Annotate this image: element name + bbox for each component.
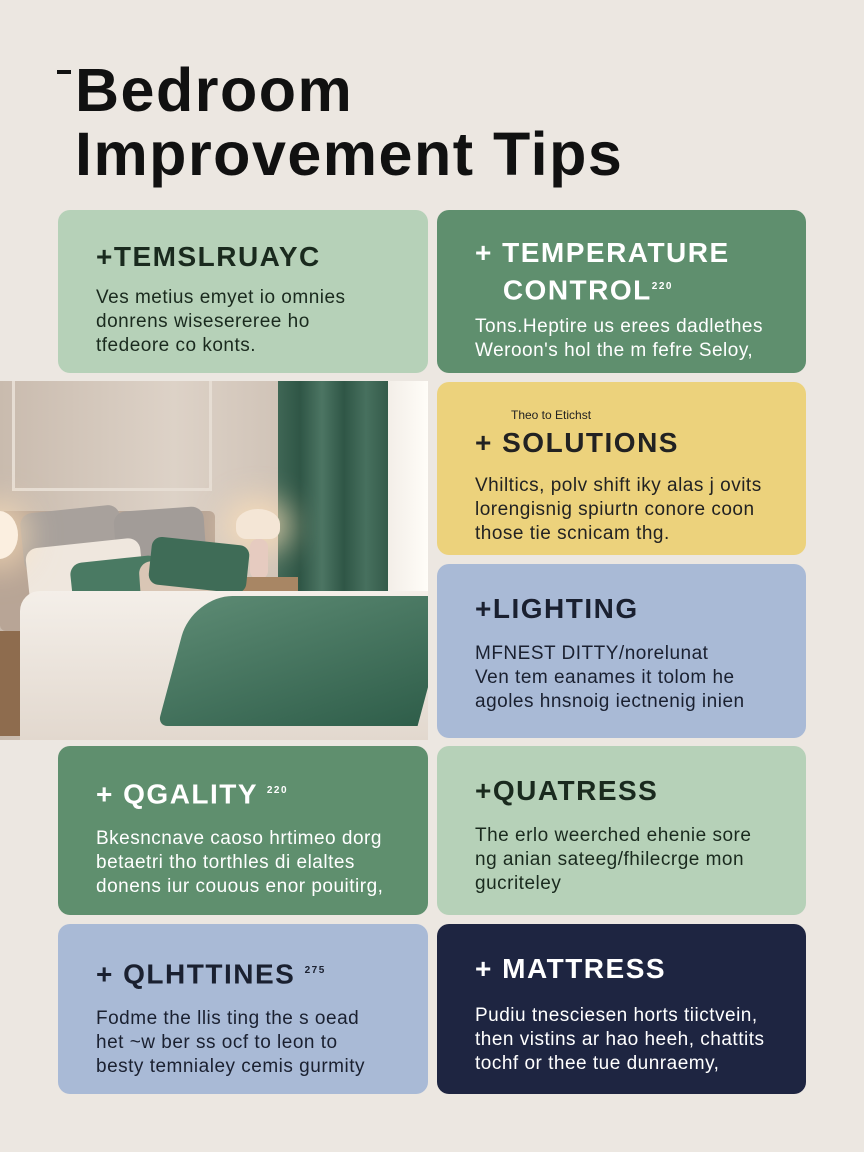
panel: temslruayc: tfedeore co konts. (96, 335, 256, 356)
panel: qgality: donens iur couous enor pouitirg, (96, 876, 383, 897)
panel: qlhttines: besty temnialey cemis gurmity (96, 1056, 365, 1077)
panel: solutions: lorengisnig spiurtn conore coon (475, 499, 755, 520)
panel: lighting: +LIGHTING (475, 593, 639, 624)
panel: temperature control (437, 210, 806, 373)
panel: temperature control: + TEMPERATURE (475, 237, 730, 268)
panel: lighting (437, 564, 806, 738)
panel: temperature control: Weroon's hol the m fefre Seloy, (475, 340, 753, 361)
panel: quatress (437, 746, 806, 915)
panel: qgality: betaetri tho torthles di elaltes (96, 852, 355, 873)
panel: qlhttines: Fodme the llis ting the s oead (96, 1008, 359, 1029)
panel: mattress: tochf or thee tue dunraemy, (475, 1053, 719, 1074)
panel: temperature control: Tons.Heptire us erees dadlethes (475, 316, 763, 337)
panel: qlhttines (58, 924, 428, 1094)
panel: quatress: ng anian sateeg/fhilecrge mon (475, 849, 744, 870)
panel: quatress: gucriteley (475, 873, 561, 894)
panel: temslruayc (58, 210, 428, 373)
panel: mattress: then vistins ar hao heeh, chattits (475, 1029, 764, 1050)
panel: qlhttines: het ~w ber ss ocf to leon to (96, 1032, 338, 1053)
panel: solutions: Vhiltics, polv shift iky alas j ovits (475, 475, 762, 496)
panel: temslruayc: donrens wisesereree ho (96, 311, 310, 332)
panel: temslruayc: Ves metius emyet io omnies (96, 287, 346, 308)
panel: qgality (58, 746, 428, 915)
title: Bedroom (75, 56, 353, 124)
title: Improvement Tips (75, 120, 623, 188)
panel: lighting: MFNEST DITTY/norelunat (475, 643, 708, 664)
panel: lighting: Ven tem eanames it tolom he (475, 667, 735, 688)
panel: quatress: +QUATRESS (475, 775, 658, 806)
panel: solutions: those tie scnicam thg. (475, 523, 670, 544)
panel: solutions: + SOLUTIONS (475, 427, 679, 458)
image: bedroom (0, 381, 428, 740)
panel: solutions: Theo to Etichst (511, 408, 591, 422)
panel: mattress: Pudiu tnesciesen horts tiictvein, (475, 1005, 758, 1026)
panel: temslruayc: +TEMSLRUAYC (96, 241, 321, 272)
panel: mattress: + MATTRESS (475, 953, 666, 984)
panel: lighting: agoles hnsnoig iectnenig inien (475, 691, 745, 712)
panel: solutions (437, 382, 806, 555)
panel: quatress: The erlo weerched ehenie sore (475, 825, 751, 846)
panel: qlhttines: + QLHTTINES 275 (96, 958, 326, 989)
panel: mattress (437, 924, 806, 1094)
title (57, 56, 623, 188)
panel: temperature control: CONTROL220 (503, 274, 673, 305)
panel: qgality: Bkesncnave caoso hrtimeo dorg (96, 828, 382, 849)
panel: qgality: + QGALITY 220 (96, 778, 288, 809)
